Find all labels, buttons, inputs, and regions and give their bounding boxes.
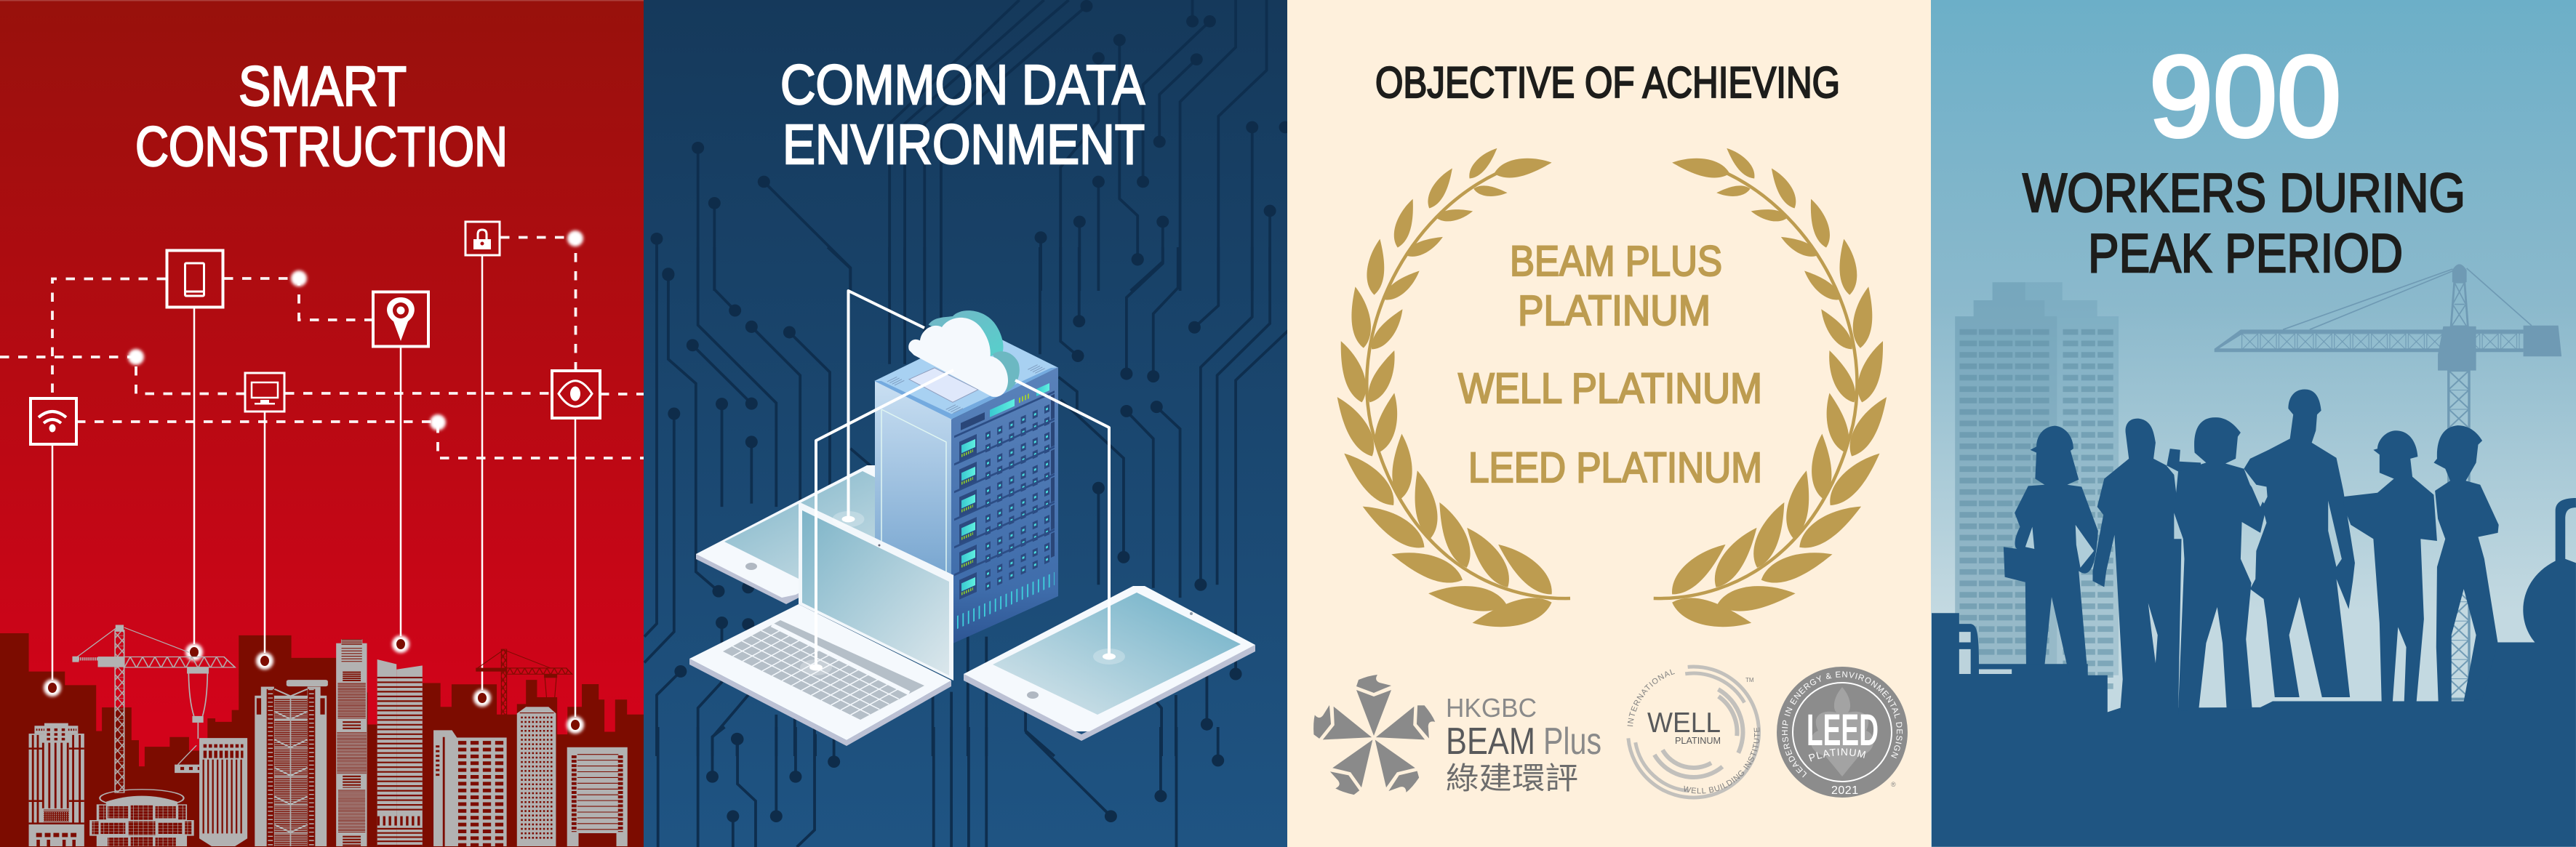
illustration: workers and site (1932, 264, 2576, 847)
illustration: server rack (874, 329, 1058, 644)
logo: WELL Platinum: INTERNATIONAL (1628, 669, 1675, 726)
logo: WELL Platinum: WELL BUILDING INSTITUTE (1684, 727, 1760, 794)
heading: smart construction: SMART (239, 55, 407, 118)
heading: workers during peak period: WORKERS DURING (2023, 162, 2465, 223)
circuit board traces (644, 0, 1292, 847)
logo: WELL Platinum (1626, 665, 1761, 800)
certification targets (1458, 238, 1762, 491)
logo: LEED Platinum seal: LEED (1807, 705, 1879, 755)
network connections (0, 237, 644, 717)
heading: common data environment: ENVIRONMENT (783, 113, 1145, 176)
icon: wifi (31, 398, 76, 444)
worker 2 with hammer (2092, 419, 2201, 715)
illustration: tablet behind server (696, 465, 963, 604)
dark city skyline backdrop (0, 633, 644, 847)
worker 3 (2174, 417, 2266, 711)
crane: dark background (476, 649, 572, 715)
icon: location pin (373, 292, 428, 346)
node lights (44, 230, 584, 734)
crane: grey foreground (72, 625, 235, 792)
heading: workers during peak period (2023, 162, 2465, 284)
panel: objective of achieving (1287, 0, 1931, 847)
panel: 900 workers (1931, 0, 2576, 847)
icon: padlock (465, 222, 500, 255)
certification targets: WELL PLATINUM (1458, 365, 1762, 412)
illustration: grey city buildings and cranes (29, 625, 628, 846)
logo: WELL Platinum: WELL (1647, 707, 1721, 739)
illustration: tablet right (964, 586, 1255, 741)
heading: smart construction (135, 55, 508, 178)
big number: 900: 900 (2149, 33, 2341, 161)
icon: BEAM star emblem (1308, 675, 1439, 800)
logo: WELL Platinum: TM (1745, 677, 1754, 683)
building 5: striped tower (336, 639, 367, 846)
worker 4 (2244, 389, 2355, 697)
building 4: braced tower (255, 680, 328, 846)
icon: phone (167, 250, 223, 307)
heading: objective of achieving: OBJECTIVE OF ACHIEVING (1375, 58, 1840, 107)
building 2: domed (89, 790, 194, 846)
icon: eye (552, 371, 600, 418)
building 6: twin stripes (377, 659, 423, 846)
heading: workers during peak period: PEAK PERIOD (2088, 222, 2403, 284)
heading: common data environment: COMMON DATA (780, 54, 1145, 116)
logo: HKGBC BEAM Plus: HKGBC (1446, 693, 1537, 723)
site ground with tank and pipework (1932, 498, 2576, 847)
tower crane (2215, 264, 2561, 699)
heading: smart construction: CONSTRUCTION (135, 116, 508, 178)
building 1 (29, 723, 84, 846)
certification targets: BEAM PLUS (1510, 238, 1722, 285)
icon: cloud (908, 310, 1020, 397)
data connection lines to cloud (800, 291, 1125, 675)
logo: LEED Platinum seal: LEADERSHIP IN ENERGY & ENVIRONMENTAL DESIGN (1782, 671, 1903, 778)
panel: common data environment (644, 0, 1292, 847)
certification targets: LEED PLATINUM (1468, 444, 1762, 491)
logo: HKGBC BEAM Plus (1308, 675, 1601, 800)
background tower (1955, 282, 2119, 691)
logo: WELL Platinum: PLATINUM (1675, 735, 1721, 746)
worker 5 (2343, 430, 2437, 702)
illustration: laptop (689, 502, 953, 746)
logo: HKGBC BEAM Plus: 綠建環評 (1446, 761, 1578, 795)
logo: HKGBC BEAM Plus: BEAM (1446, 720, 1535, 763)
building 7 (433, 730, 507, 846)
worker silhouettes (2004, 389, 2499, 715)
gaps between limbs (2025, 486, 2342, 663)
building 8: dotted tower (517, 707, 556, 846)
laurel wreath (1329, 144, 1895, 636)
logo: HKGBC BEAM Plus: Plus (1543, 720, 1601, 763)
worker 6 (2433, 425, 2499, 702)
logo: LEED Platinum seal: ® (1891, 781, 1896, 788)
building 9 (567, 747, 628, 846)
heading: common data environment (780, 54, 1145, 176)
icon: desktop monitor (245, 373, 284, 412)
building 3 (199, 738, 247, 846)
worker 1 (2004, 426, 2098, 675)
logo: LEED Platinum seal: 2021 (1831, 784, 1859, 797)
certification targets: PLATINUM (1518, 287, 1711, 334)
logo: LEED Platinum seal: PLATINUM (1808, 748, 1866, 762)
